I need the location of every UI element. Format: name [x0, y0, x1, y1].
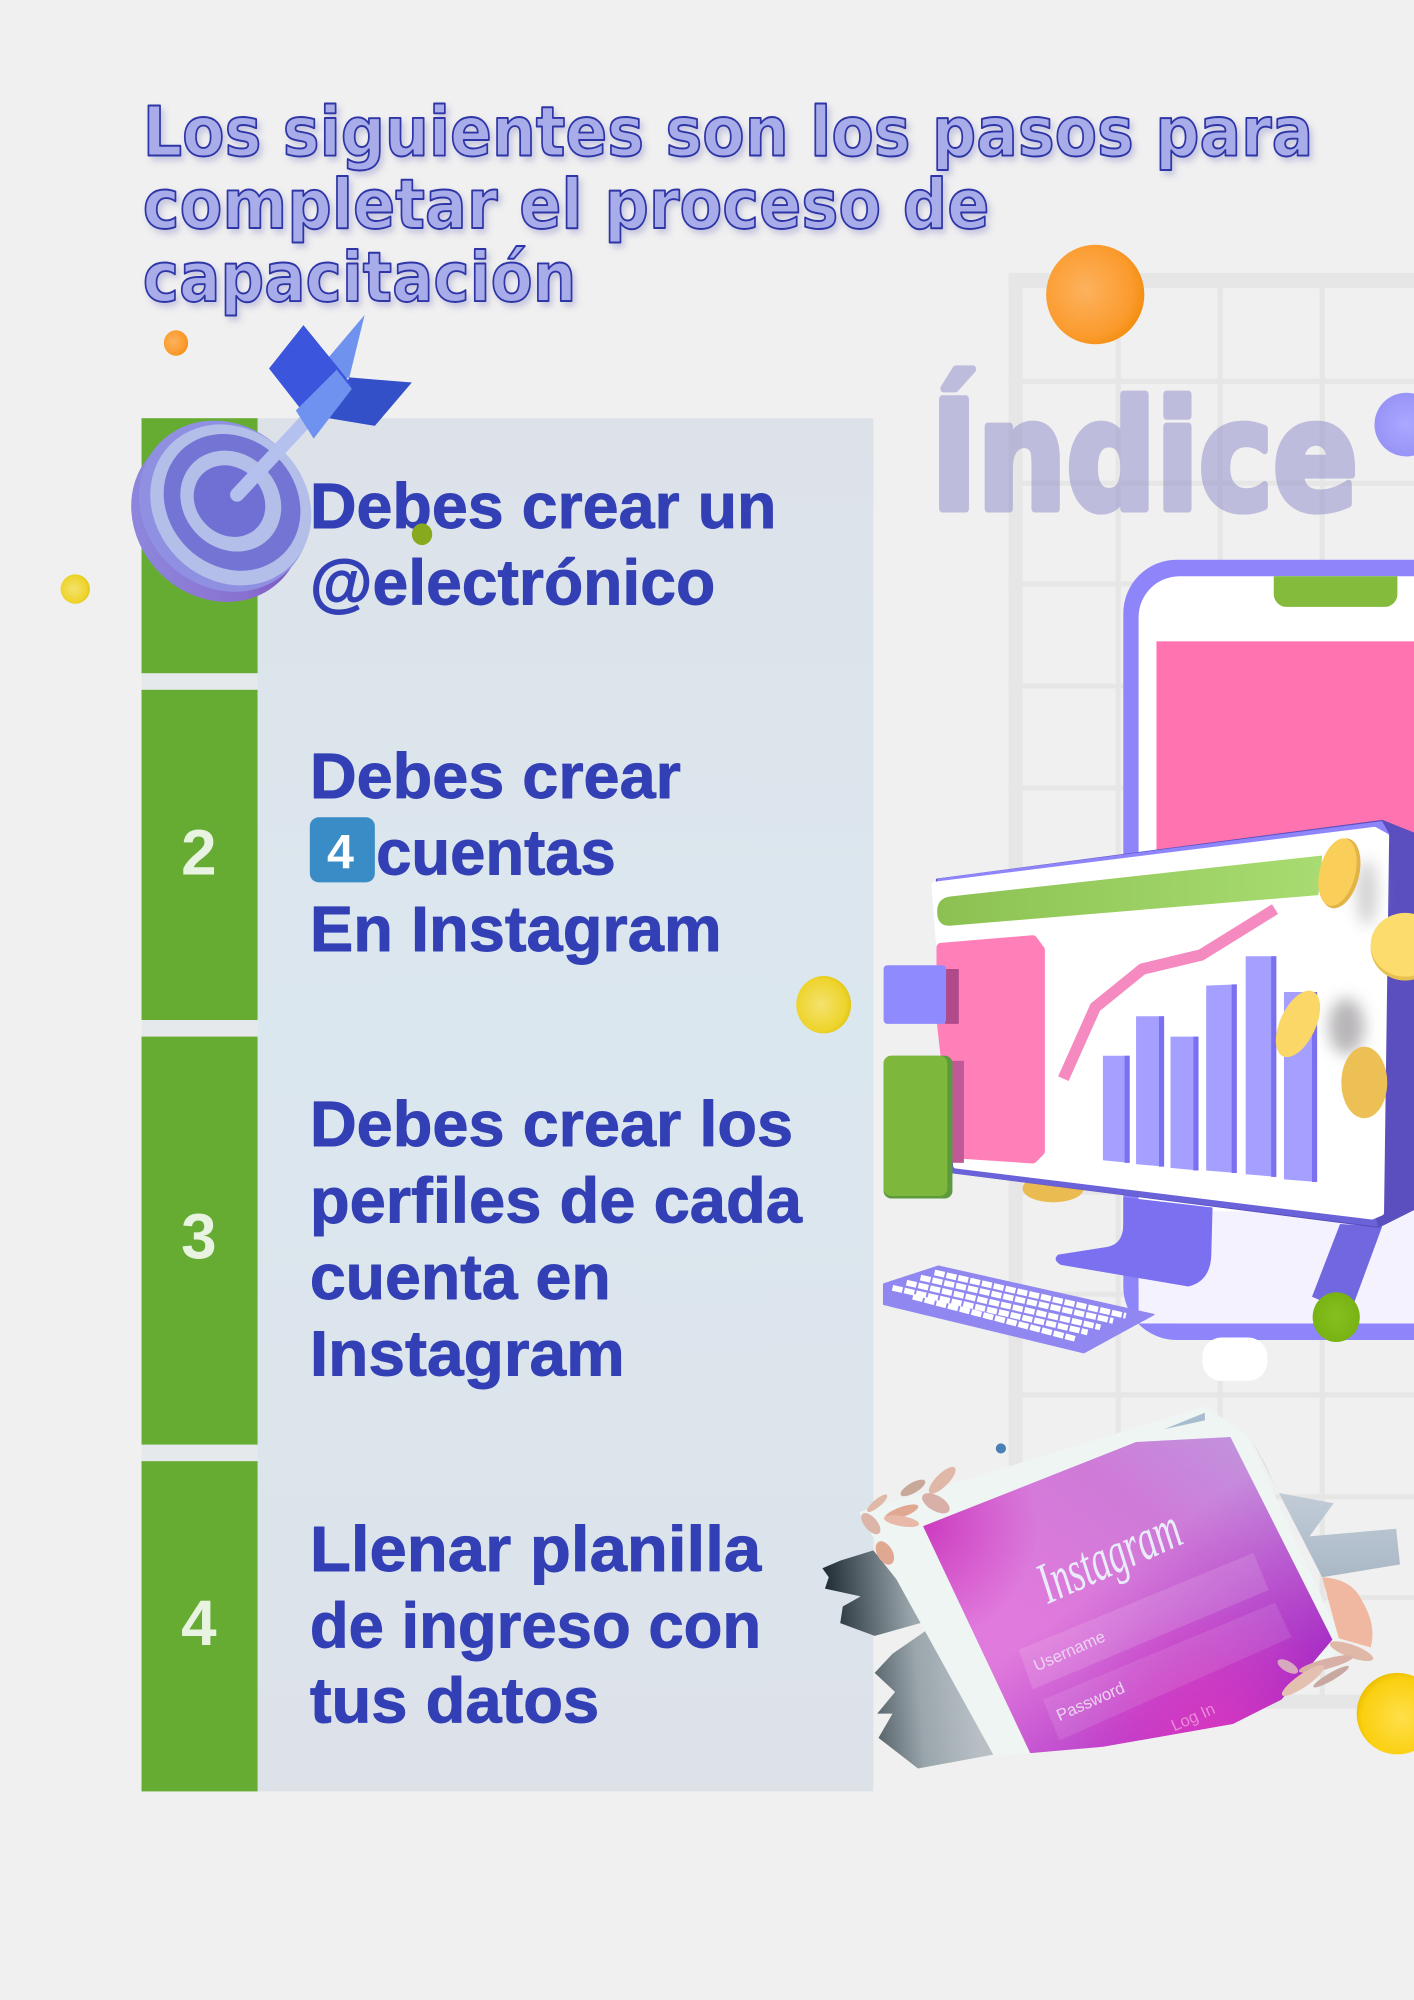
pink panel [941, 940, 1040, 1159]
bar chart [1103, 956, 1317, 1182]
monitor face [935, 830, 1386, 1216]
brush strokes [822, 1436, 1400, 1768]
username label: Username [1030, 1627, 1108, 1675]
yellow sphere [1357, 1673, 1414, 1754]
step 3 text: Instagram [310, 1318, 625, 1390]
username field [1019, 1553, 1269, 1689]
green block [884, 1056, 952, 1199]
step 3 text: Debes crear los [310, 1088, 793, 1160]
step 4 text: de ingreso con [310, 1589, 761, 1661]
top streak [1164, 1413, 1205, 1429]
password label: Password [1053, 1678, 1128, 1725]
background grid [1009, 273, 1414, 1709]
floral corner left [858, 1463, 959, 1568]
step number 3: 3 [181, 1200, 217, 1272]
photo: Instagram login on phone [822, 1406, 1400, 1768]
target disc [96, 385, 345, 637]
password field [1043, 1603, 1292, 1740]
mouse [1202, 1337, 1267, 1381]
hidden coin [1023, 1174, 1084, 1202]
step 1 bar [142, 418, 258, 673]
step 3 text [310, 1088, 803, 1390]
Instagram wordmark: Instagram [1026, 1495, 1191, 1616]
title: completar el proceso de [143, 165, 989, 245]
illustration: computer monitor [884, 821, 1414, 1313]
icon: dart and target [96, 315, 412, 637]
monitor leg [1312, 1224, 1382, 1313]
step 3 text: perfiles de cada [310, 1165, 803, 1237]
step number 2: 2 [181, 817, 217, 889]
step 2 text [310, 740, 722, 965]
monitor stand [1056, 1197, 1213, 1286]
step 3 bar [142, 1037, 258, 1445]
step 4 text: tus datos [310, 1665, 599, 1737]
step 3 text: cuenta en [310, 1241, 611, 1313]
monitor body [937, 821, 1414, 1227]
step 4 text: Llenar planilla [310, 1513, 762, 1585]
title [143, 93, 1313, 318]
step 2 bar [142, 690, 258, 1020]
dart fins [269, 315, 412, 439]
camera dot [996, 1443, 1006, 1454]
green sphere [1313, 1292, 1360, 1342]
soft shadows [1329, 859, 1377, 1054]
step 4 bar [142, 1461, 258, 1791]
step 1 text: @electrónico [310, 546, 715, 618]
step gaps [142, 673, 258, 1461]
coins [1267, 834, 1414, 1118]
square shadows [945, 969, 959, 1024]
panel: steps [142, 418, 873, 1791]
keyboard [884, 1266, 1154, 1353]
line chart [1063, 909, 1275, 1079]
panel background [258, 418, 873, 1791]
step 1 text [310, 470, 776, 618]
step 1 text: Debes crear un [310, 470, 776, 542]
phone body [859, 1406, 1344, 1757]
number badge: 4 [327, 825, 354, 879]
phone screen [923, 1437, 1332, 1753]
dart shaft [237, 421, 306, 495]
purple square [884, 965, 946, 1024]
decorative spheres [61, 245, 1414, 1033]
green header bar [937, 856, 1322, 926]
step number 4: 4 [181, 1587, 217, 1659]
step 2 text: Debes crear [310, 740, 681, 812]
step 4 text [310, 1513, 762, 1737]
step 2 text: En Instagram [310, 893, 722, 965]
title: Los siguientes son los pasos para [143, 93, 1313, 173]
phone notch [1274, 576, 1397, 607]
title: capacitación [143, 238, 576, 318]
illustration: phone behind monitor [1123, 560, 1414, 1340]
number badge [310, 817, 375, 882]
floral corner right [1275, 1577, 1375, 1700]
step 2 text: cuentas [376, 817, 616, 889]
phone screen [1156, 641, 1414, 871]
login label: Log In [1168, 1699, 1218, 1735]
